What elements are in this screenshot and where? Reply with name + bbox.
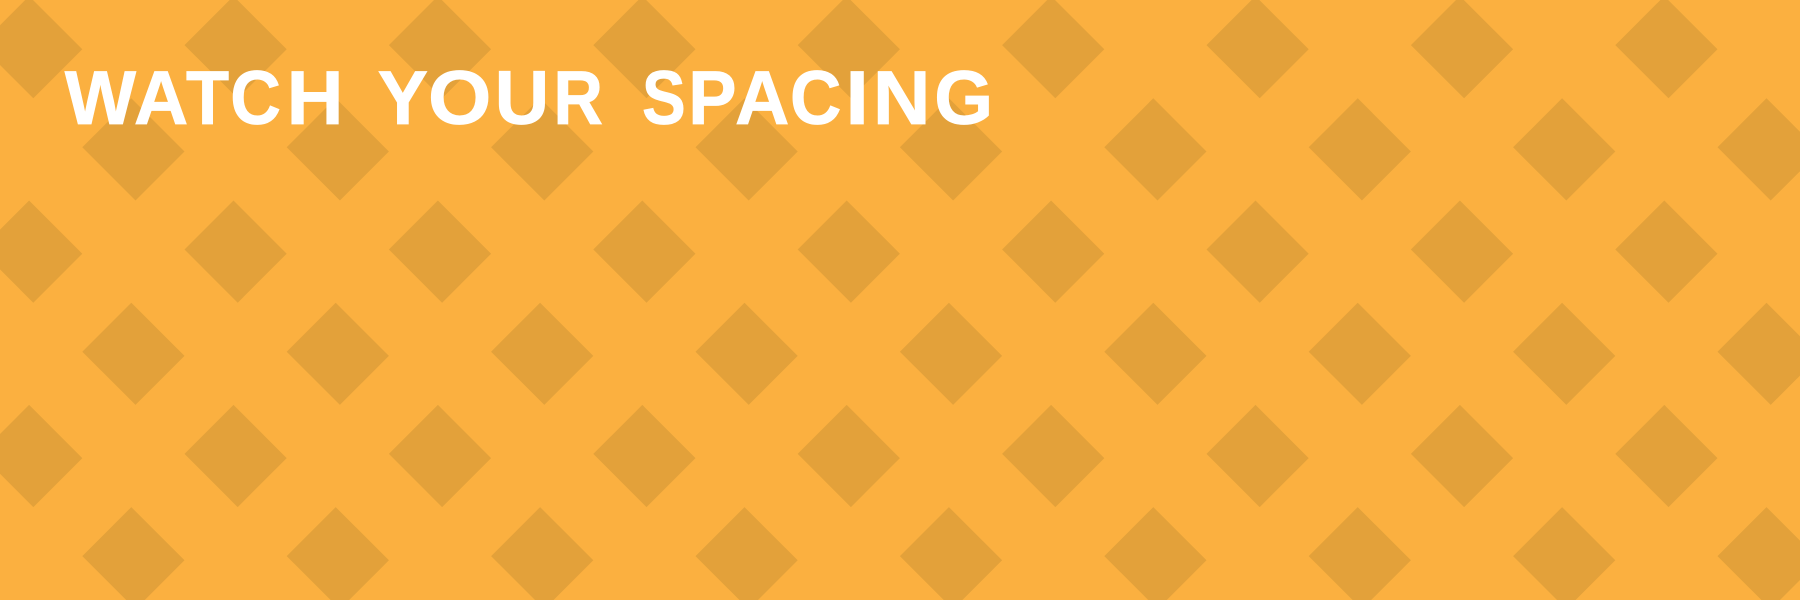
title: U (495, 56, 549, 141)
title: N (873, 56, 930, 141)
title: R (553, 56, 603, 141)
title: W (65, 56, 136, 141)
title: C (790, 56, 841, 141)
title: P (688, 56, 736, 141)
title: S (642, 56, 686, 141)
title: A (134, 56, 188, 141)
title: C (230, 56, 281, 141)
title: I (845, 56, 869, 141)
title: Y (378, 56, 428, 141)
title: O (428, 56, 491, 141)
title: G (934, 56, 993, 141)
title: A (735, 56, 789, 141)
title: H (287, 56, 344, 141)
title: T (186, 56, 229, 141)
